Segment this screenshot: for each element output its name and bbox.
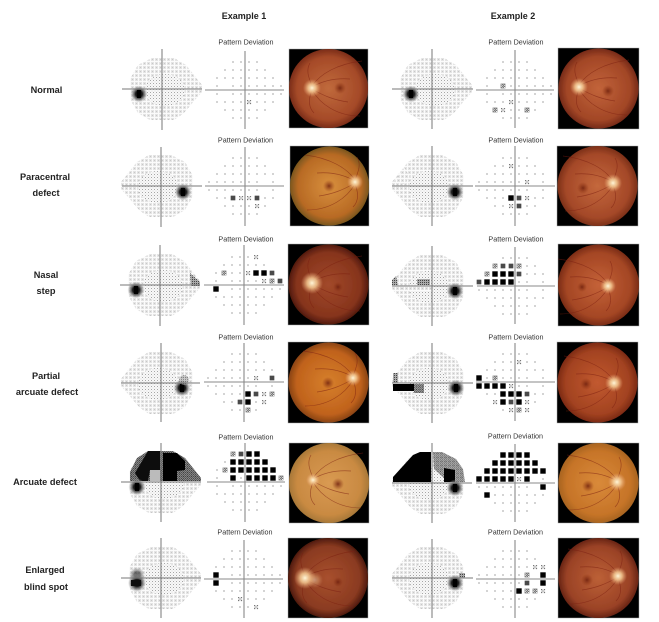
pattern deviation captions: Pattern Deviation — [488, 234, 544, 244]
row label: Enlarged blind spot: Enlarged — [25, 565, 65, 575]
fundus photo: enlarged blind spot example 2 — [558, 538, 639, 618]
visual field: nasal step example 1 — [120, 245, 200, 326]
row label: Partial arcuate defect — [16, 371, 78, 397]
visual field: normal example 1 — [122, 49, 202, 130]
fundus photo: partial arcuate defect example 1 — [288, 342, 369, 423]
pattern deviation captions: Pattern Deviation — [488, 136, 544, 144]
visual field: partial arcuate defect example 2 — [392, 343, 473, 423]
pattern deviation: nasal step example 2 — [477, 247, 555, 324]
row label: Partial arcuate defect: arcuate defect — [16, 387, 78, 397]
pattern deviation: partial arcuate defect example 1 — [204, 343, 284, 422]
panel: all charts and photos — [120, 48, 639, 618]
fundus photo: paracentral defect example 2 — [557, 146, 638, 226]
pattern deviation: arcuate defect example 2 — [476, 444, 555, 522]
row label: Enlarged blind spot: blind spot — [24, 582, 68, 592]
visual field: partial arcuate defect example 1 — [121, 343, 200, 422]
pattern deviation captions: Pattern Deviation — [217, 528, 273, 536]
visual field: paracentral defect example 1 — [121, 147, 202, 227]
fundus photo: arcuate defect example 2 — [558, 443, 639, 523]
visual field: paracentral defect example 2 — [392, 146, 473, 226]
heading: Example 1: Example 1 — [222, 11, 266, 21]
visual field: enlarged blind spot example 2 — [392, 539, 473, 618]
row label: Nasal step — [34, 270, 58, 296]
row label: Enlarged blind spot — [24, 565, 68, 592]
fundus photo: partial arcuate defect example 2 — [557, 342, 638, 423]
fundus photo: nasal step example 2 — [558, 244, 639, 326]
pattern deviation captions: Pattern Deviation — [488, 332, 544, 342]
visual field: enlarged blind spot example 1 — [121, 538, 201, 618]
pattern deviation captions: Pattern Deviation — [488, 432, 543, 440]
pattern deviation: enlarged blind spot example 1 — [204, 540, 283, 618]
pattern deviation captions: Pattern Deviation — [218, 234, 274, 244]
fundus photo: enlarged blind spot example 1 — [288, 538, 368, 618]
row label: Nasal step: Nasal — [34, 270, 58, 280]
visual field: arcuate defect example 1 — [121, 443, 201, 522]
row label: Paracentral defect: Paracentral — [20, 172, 70, 182]
pattern deviation: enlarged blind spot example 2 — [476, 540, 555, 618]
pattern deviation: normal example 1 — [205, 51, 284, 129]
pattern deviation: paracentral defect example 1 — [205, 147, 284, 226]
pattern deviation: partial arcuate defect example 2 — [476, 343, 555, 421]
fundus photo: normal example 1 — [289, 49, 368, 128]
pattern deviation captions — [217, 38, 544, 536]
pattern deviation captions: Pattern Deviation — [488, 528, 543, 536]
fundus photo: paracentral defect example 1 — [290, 146, 369, 226]
pattern deviation: normal example 2 — [476, 50, 554, 128]
pattern deviation captions: Pattern Deviation — [218, 432, 274, 442]
pattern deviation: paracentral defect example 2 — [475, 146, 555, 226]
pattern deviation: nasal step example 1 — [204, 245, 284, 325]
row label: Normal: Normal — [31, 85, 62, 95]
visual field: arcuate defect example 2 — [392, 443, 472, 523]
fundus photo: nasal step example 1 — [288, 244, 369, 325]
fundus photo: normal example 2 — [558, 48, 639, 129]
fundus photo: arcuate defect example 1 — [289, 443, 369, 523]
row label: Partial arcuate defect: Partial — [32, 371, 60, 381]
pattern deviation captions: Pattern Deviation — [218, 332, 274, 342]
heading: Example 2: Example 2 — [491, 11, 535, 21]
row label: Nasal step: step — [37, 286, 56, 296]
pattern deviation captions: Pattern Deviation — [218, 38, 274, 46]
visual field: nasal step example 2 — [392, 246, 473, 326]
row label: Arcuate defect: Arcuate defect — [13, 477, 77, 487]
pattern deviation: arcuate defect example 1 — [207, 443, 285, 522]
row label: Paracentral defect: defect — [32, 188, 60, 198]
visual field: normal example 2 — [392, 49, 473, 129]
row label: Paracentral defect — [20, 172, 70, 198]
pattern deviation captions: Pattern Deviation — [218, 136, 273, 144]
pattern deviation captions: Pattern Deviation — [488, 38, 544, 46]
